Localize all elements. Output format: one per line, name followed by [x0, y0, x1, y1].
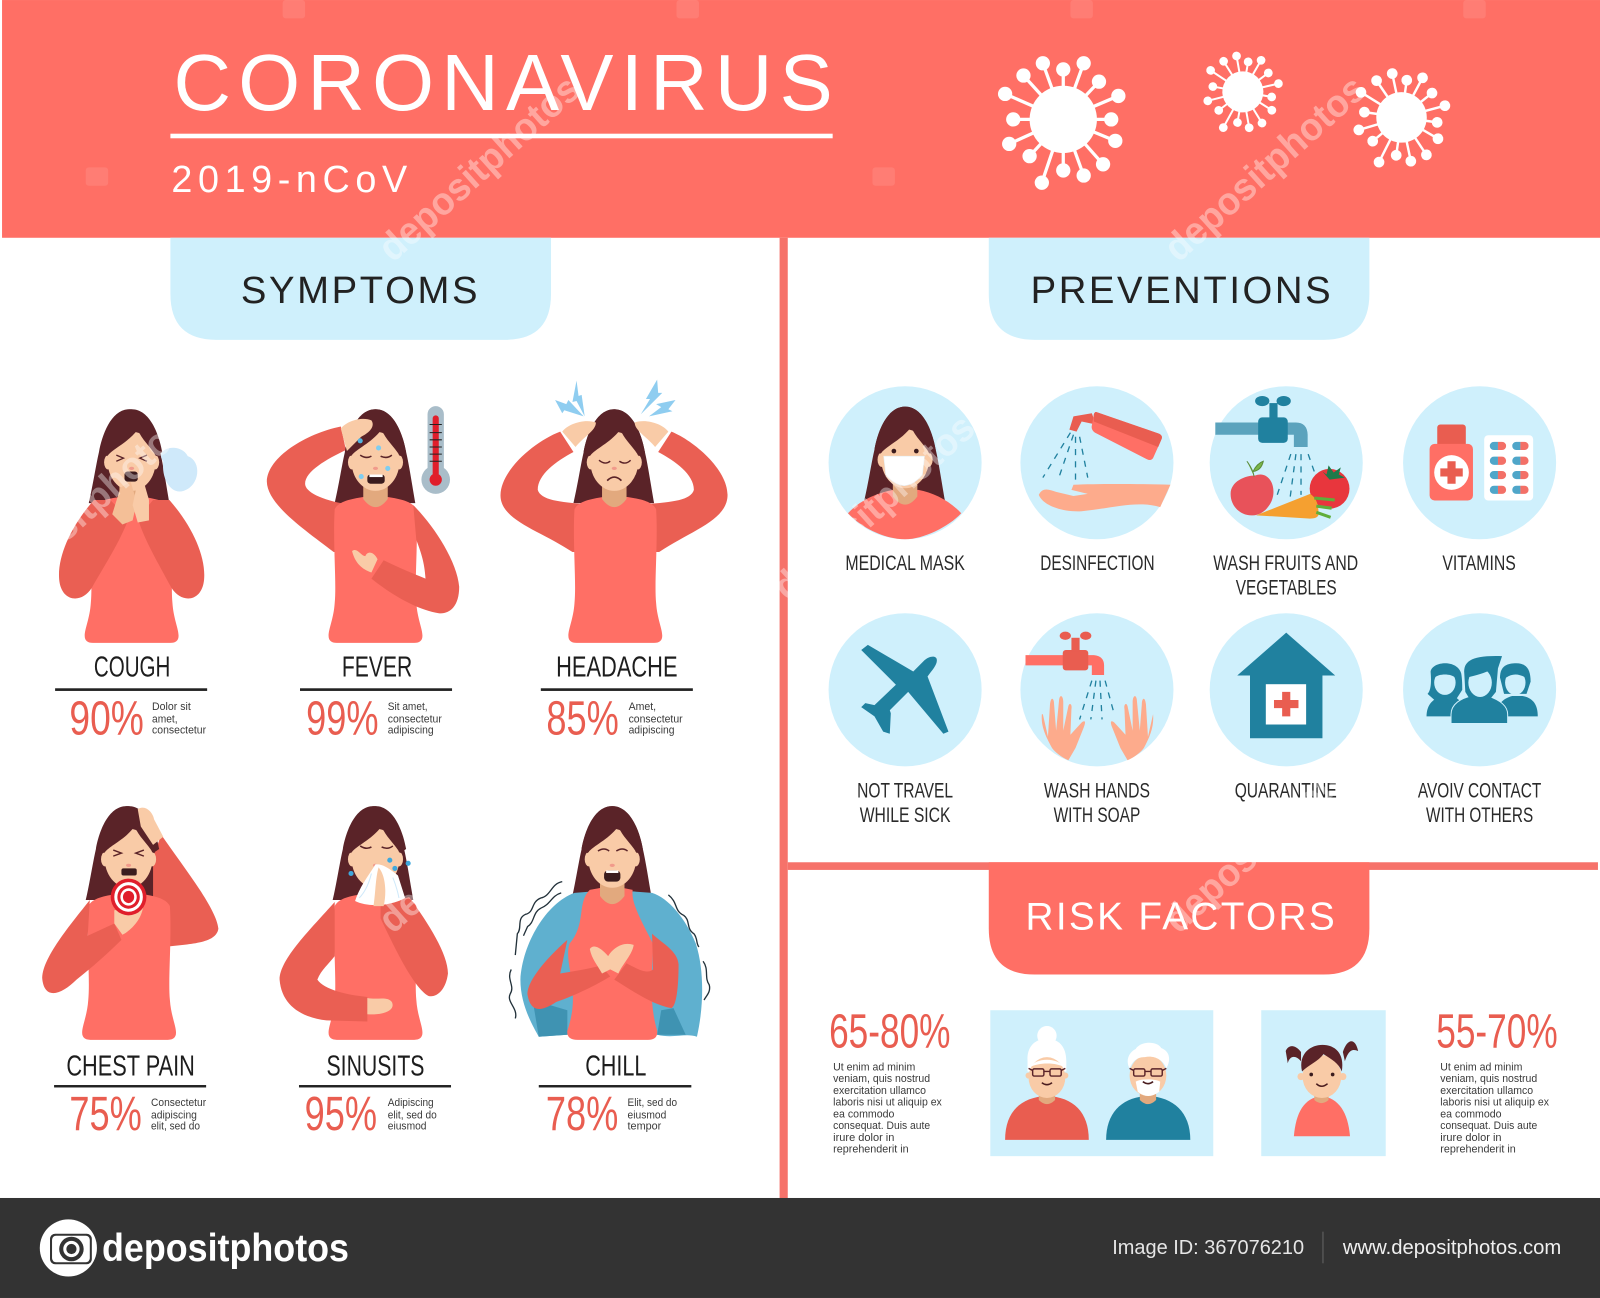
preventions heading tab — [989, 238, 1369, 340]
chill label: CHILL — [585, 1051, 646, 1083]
headache illustration — [501, 409, 728, 643]
panel: symptoms — [42, 238, 728, 1141]
icon: airplane — [829, 613, 982, 766]
symptoms heading tab — [170, 238, 551, 340]
risk: right description: reprehenderit in — [1440, 1144, 1516, 1156]
symptom: chest pain — [42, 806, 218, 1141]
risk: right description: consequat. Duis aute — [1440, 1120, 1537, 1132]
risk: left description: veniam, quis nostrud — [833, 1073, 930, 1085]
chest pain description: adipiscing — [151, 1109, 197, 1121]
label: QUARANTINE — [1235, 778, 1337, 802]
risk: right percentage: 55-70% — [1436, 1005, 1558, 1058]
prevention: wash fruits and vegetables — [1210, 386, 1363, 599]
sinusitis description: eiusmod — [388, 1121, 427, 1133]
site url: www.depositphotos.com — [1342, 1237, 1561, 1259]
chest pain illustration — [42, 806, 218, 1040]
label: DESINFECTION — [1040, 551, 1155, 575]
fever description — [388, 701, 442, 737]
headache percentage: 85% — [546, 693, 619, 746]
sinusitis description — [388, 1097, 437, 1133]
icon: large virus — [998, 56, 1126, 190]
chill percentage: 78% — [546, 1088, 618, 1141]
label: AVOIV CONTACT — [1418, 778, 1541, 802]
chest pain label: CHEST PAIN — [66, 1051, 195, 1083]
label — [1044, 778, 1150, 827]
fever percentage: 99% — [306, 693, 379, 746]
headache description — [629, 701, 683, 737]
risk: left description: consequat. Duis aute — [833, 1120, 930, 1132]
title underline — [170, 134, 833, 138]
sinusitis label: SINUSITS — [327, 1051, 424, 1083]
risk: left description: irure dolor in — [833, 1132, 894, 1144]
chest pain description: elit, sed do — [151, 1121, 200, 1133]
label: VEGETABLES — [1236, 575, 1337, 599]
risk: right description: veniam, quis nostrud — [1440, 1073, 1537, 1085]
fever illustration — [267, 409, 459, 643]
label: NOT TRAVEL — [857, 778, 953, 802]
chest pain percentage: 75% — [69, 1088, 142, 1141]
icon: shiver lines — [509, 882, 710, 1018]
label: WASH FRUITS AND — [1213, 551, 1358, 575]
risk: left description — [833, 1061, 942, 1156]
risk: left percentage: 65-80% — [829, 1005, 951, 1058]
sinusitis description: Adipiscing — [388, 1097, 434, 1109]
label: WITH SOAP — [1054, 803, 1140, 827]
prevention: quarantine — [1210, 613, 1363, 802]
cough label: COUGH — [94, 652, 170, 684]
cough illustration — [59, 409, 204, 643]
sinusitis percentage: 95% — [305, 1088, 377, 1141]
risk: left description: laboris nisi ut aliquip ex — [833, 1097, 942, 1109]
cough percentage: 90% — [69, 693, 144, 746]
symptom: fever — [267, 406, 459, 746]
icon: woman with mask — [829, 386, 982, 539]
headache description: adipiscing — [629, 725, 675, 737]
risk: right description: irure dolor in — [1440, 1132, 1502, 1144]
panel: risk factors — [829, 862, 1558, 1156]
fever description: Sit amet, — [388, 701, 428, 713]
fever description: consectetur — [388, 713, 442, 725]
headache description: Amet, — [629, 701, 656, 713]
title: CORONAVIRUS — [173, 38, 833, 127]
label — [1213, 551, 1358, 599]
icon: house with cross — [1210, 613, 1363, 766]
symptom: headache — [501, 380, 728, 746]
prevention: wash hands with soap — [1020, 613, 1173, 827]
label — [857, 778, 953, 827]
icon: pain target — [111, 879, 146, 915]
chill illustration — [520, 806, 702, 1040]
prevention: vitamins — [1403, 386, 1556, 575]
symptoms heading tab: SYMPTOMS — [241, 269, 478, 312]
label: WITH OTHERS — [1426, 803, 1533, 827]
text: depositphotos — [1156, 67, 1374, 270]
icon: bottle and pills — [1403, 386, 1556, 539]
label: MEDICAL MASK — [845, 551, 965, 575]
risk: right description: laboris nisi ut aliquip ex — [1440, 1097, 1550, 1109]
label: VITAMINS — [1442, 551, 1516, 575]
symptom: chill — [509, 806, 710, 1141]
text: depositphotos — [1156, 739, 1374, 941]
chill description: Elit, sed do — [628, 1097, 677, 1109]
vertical divider — [780, 238, 788, 1199]
logo wordmark: depositphotos — [102, 1227, 349, 1270]
text: depositphotos — [370, 739, 588, 941]
risk factors heading tab: RISK FACTORS — [1026, 896, 1335, 939]
symptom: cough — [55, 409, 207, 746]
label: WASH HANDS — [1044, 778, 1150, 802]
icon: three people — [1403, 613, 1556, 766]
header banner — [2, 0, 1600, 238]
label — [1418, 778, 1541, 827]
illustration: elderly couple — [990, 1010, 1213, 1156]
horizontal divider — [788, 862, 1598, 870]
cough description: consectetur — [152, 725, 207, 737]
text: depositphotos — [370, 67, 588, 270]
risk factors heading tab — [989, 862, 1369, 975]
chill description — [628, 1097, 677, 1133]
risk: left description: reprehenderit in — [833, 1144, 909, 1156]
image id: Image ID: 367076210 — [1112, 1237, 1304, 1259]
prevention: medical mask — [829, 386, 982, 575]
headache label: HEADACHE — [556, 652, 678, 684]
icon: faucet with fruits — [1210, 386, 1363, 539]
fever description: adipiscing — [388, 725, 434, 737]
risk: left description: exercitation ullamco — [833, 1085, 926, 1097]
cough description — [152, 701, 207, 737]
chest pain description — [151, 1097, 207, 1133]
risk: right description: Ut enim ad minim — [1440, 1061, 1523, 1073]
sinusitis illustration — [280, 806, 448, 1040]
subtitle: 2019-nCoV — [171, 158, 408, 200]
prevention: not travel while sick — [829, 613, 982, 827]
cough description: amet, — [152, 713, 178, 725]
icon: faucet and hands — [1020, 613, 1173, 766]
panel: preventions — [829, 238, 1556, 827]
risk: left description: ea commodo — [833, 1108, 894, 1120]
chill description: eiusmod — [628, 1109, 666, 1121]
cough description: Dolor sit — [152, 701, 191, 713]
headache description: consectetur — [629, 713, 683, 725]
risk: left description: Ut enim ad minim — [833, 1061, 915, 1073]
illustration: child — [1261, 1010, 1386, 1156]
icon: spray bottle and hand — [1020, 386, 1173, 539]
icon: medium virus — [1346, 64, 1454, 176]
chest pain description: Consectetur — [151, 1097, 207, 1109]
sinusitis description: elit, sed do — [388, 1109, 437, 1121]
symptom: sinusitis — [280, 806, 451, 1141]
icon: pain bolts — [555, 380, 676, 416]
label: WHILE SICK — [860, 803, 951, 827]
icon: thermometer — [421, 406, 450, 494]
icon: small virus — [1196, 47, 1287, 141]
prevention: avoid contact — [1403, 613, 1556, 827]
risk: right description: exercitation ullamco — [1440, 1085, 1533, 1097]
risk: right description — [1440, 1061, 1550, 1156]
footer bar — [0, 1198, 1600, 1298]
preventions heading tab: PREVENTIONS — [1031, 269, 1331, 312]
chill description: tempor — [628, 1121, 662, 1133]
text: depositphotos — [765, 406, 983, 609]
fever label: FEVER — [342, 652, 412, 684]
icon: camera logo — [40, 1219, 97, 1277]
risk: right description: ea commodo — [1440, 1108, 1502, 1120]
prevention: desinfection — [1020, 386, 1173, 575]
